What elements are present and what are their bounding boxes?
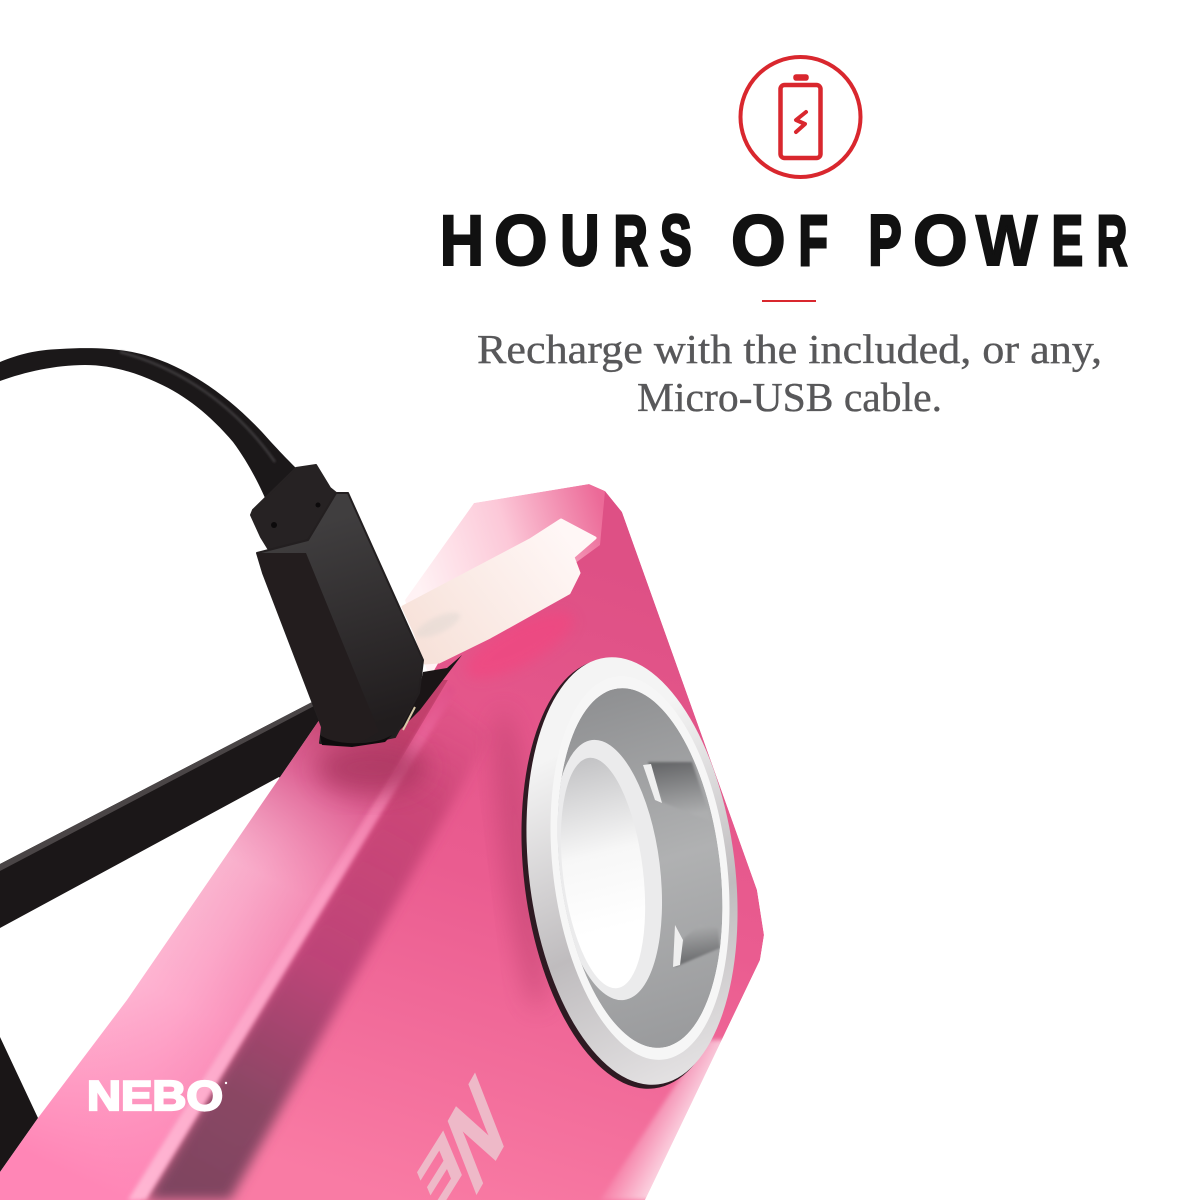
lens assembly xyxy=(521,657,738,1089)
device logo xyxy=(417,1072,504,1200)
bottom right fade xyxy=(603,1037,723,1200)
red divider xyxy=(762,300,816,302)
brand logo: NEBO: NEBO xyxy=(87,1072,223,1119)
connector slot xyxy=(392,655,462,738)
lower stand leg xyxy=(0,1037,70,1190)
lower notch xyxy=(675,925,720,967)
heading: O xyxy=(494,202,548,281)
USB connector xyxy=(251,465,462,747)
heading: P xyxy=(868,202,902,281)
shadow band xyxy=(145,700,490,1200)
heading: W xyxy=(976,202,1037,281)
heading: F xyxy=(798,202,828,281)
photo: flashlight with cable xyxy=(0,348,780,1200)
plug shadow xyxy=(317,742,427,794)
plug housing xyxy=(257,493,423,745)
reflector cup xyxy=(558,688,722,1048)
top face xyxy=(405,484,606,671)
flexible gel cover xyxy=(403,520,595,663)
heading: S xyxy=(660,202,692,281)
strain relief xyxy=(251,465,340,550)
cable xyxy=(0,348,298,505)
icon: battery in red circle xyxy=(740,57,860,177)
heading: U xyxy=(560,202,599,281)
flashlight body xyxy=(0,484,780,1200)
plug dots xyxy=(271,502,320,528)
side face xyxy=(0,680,448,1200)
description text: Recharge with the included, or any, xyxy=(477,326,1102,372)
gold contact xyxy=(403,707,415,730)
bezel halo xyxy=(490,720,550,1002)
inner white rim xyxy=(530,666,750,1070)
plug foot xyxy=(320,735,392,747)
plug dark side xyxy=(257,553,379,745)
upper notch xyxy=(648,761,704,806)
metal bezel xyxy=(504,645,760,1097)
heading: O xyxy=(913,202,968,281)
heading: O xyxy=(731,202,786,281)
heading: H xyxy=(440,202,484,281)
lens centre xyxy=(562,758,645,988)
heading: R xyxy=(614,202,648,281)
description text xyxy=(477,326,1102,420)
lens outer xyxy=(558,740,662,1000)
heading: R xyxy=(1097,202,1127,281)
bezel shadow xyxy=(498,647,758,1101)
description text: Micro-USB cable. xyxy=(637,374,942,420)
black stand arm xyxy=(0,700,335,928)
crease highlight xyxy=(128,712,438,1200)
glow below gel cover xyxy=(473,614,569,674)
front face xyxy=(130,491,764,1200)
heading: E xyxy=(1052,202,1083,281)
